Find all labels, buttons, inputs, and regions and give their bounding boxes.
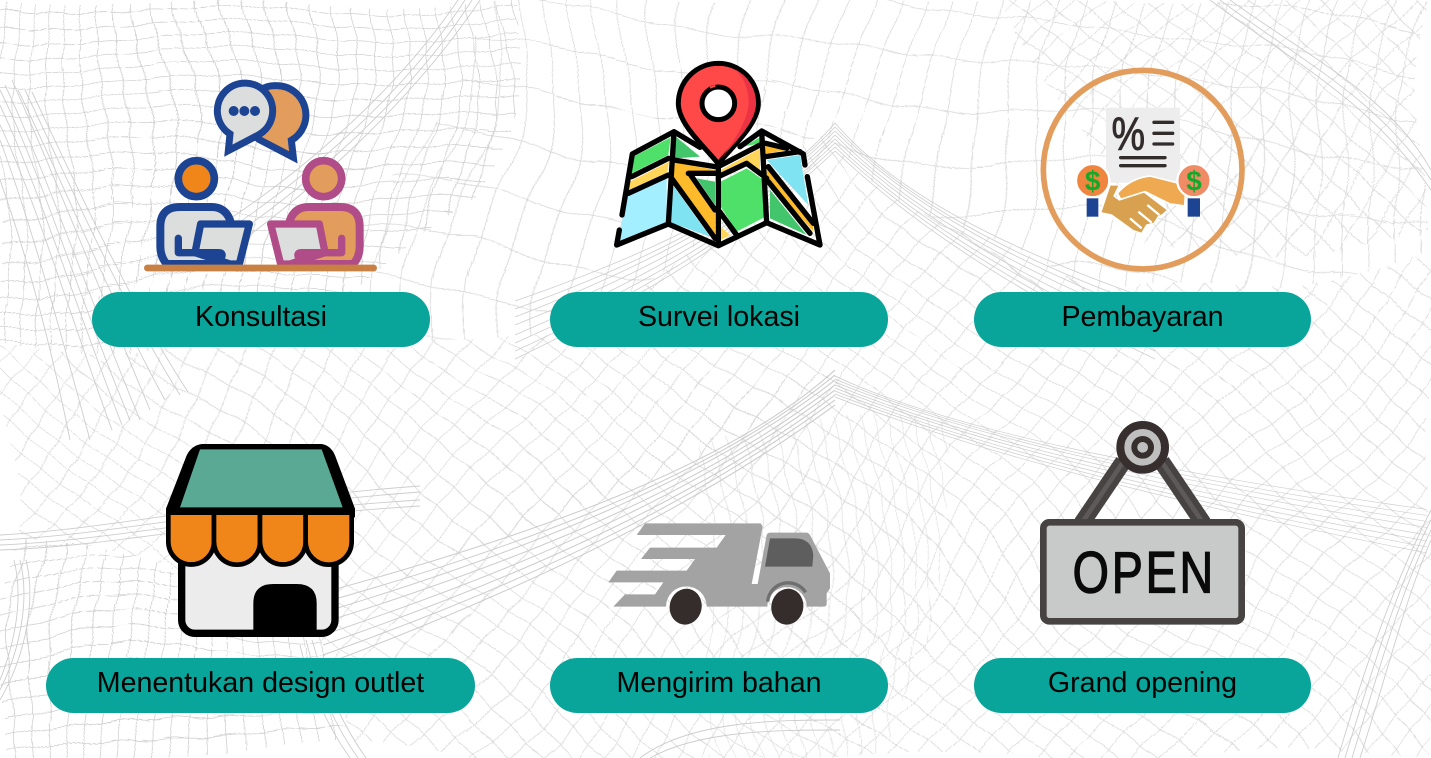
- map colour panels: [618, 136, 813, 242]
- right coin and cuff: [1177, 164, 1211, 217]
- icon part: right person: [271, 161, 360, 264]
- awning: [168, 513, 352, 565]
- label: Menentukan design outlet: [46, 658, 475, 713]
- icon: open sign: [1040, 421, 1245, 625]
- label: Menentukan design outlet: Menentukan design outlet: [97, 667, 424, 699]
- right coin and cuff: $: [1186, 166, 1202, 197]
- label: Mengirim bahan: [550, 658, 888, 713]
- left coin and cuff: [1076, 164, 1109, 217]
- icon: delivery truck: [608, 523, 830, 625]
- orange ring: [1043, 70, 1242, 269]
- wheels: [666, 586, 807, 628]
- store building: [182, 540, 335, 633]
- label: Survei lokasi: [550, 292, 888, 347]
- label: Grand opening: Grand opening: [1048, 667, 1237, 699]
- label: Konsultasi: Konsultasi: [195, 301, 327, 333]
- hanging straps: [1082, 462, 1203, 523]
- location pin: [678, 63, 758, 164]
- sign board: [1043, 522, 1242, 621]
- ring: [1120, 425, 1165, 470]
- icon part: grey speech bubble: [217, 83, 273, 151]
- label: Pembayaran: Pembayaran: [1061, 301, 1224, 333]
- label: Grand opening: [974, 658, 1311, 713]
- label: Konsultasi: [92, 292, 430, 347]
- icon part: table: [147, 258, 374, 278]
- truck window: [765, 538, 813, 567]
- shaking hands: [1101, 176, 1186, 233]
- label: Pembayaran: [974, 292, 1311, 347]
- icon: payment handshake: [1040, 68, 1245, 272]
- document with percent: %: [1112, 107, 1145, 159]
- label: Mengirim bahan: Mengirim bahan: [616, 667, 822, 699]
- icon: store: [166, 444, 356, 637]
- truck body with speed lines: [608, 523, 830, 607]
- wheel arch shadow: [768, 583, 806, 602]
- sign text: OPEN: [1073, 541, 1213, 606]
- roof: [166, 444, 355, 517]
- document with percent: [1106, 107, 1180, 183]
- map outlines: [617, 131, 820, 246]
- label: Survei lokasi: Survei lokasi: [638, 301, 800, 333]
- icon: consultation: [144, 80, 377, 272]
- left coin and cuff: $: [1085, 166, 1101, 197]
- icon part: left person: [160, 161, 249, 264]
- store door: [253, 584, 317, 633]
- icon part: orange speech bubble: [246, 86, 306, 157]
- icon: map with location pin: [614, 60, 823, 248]
